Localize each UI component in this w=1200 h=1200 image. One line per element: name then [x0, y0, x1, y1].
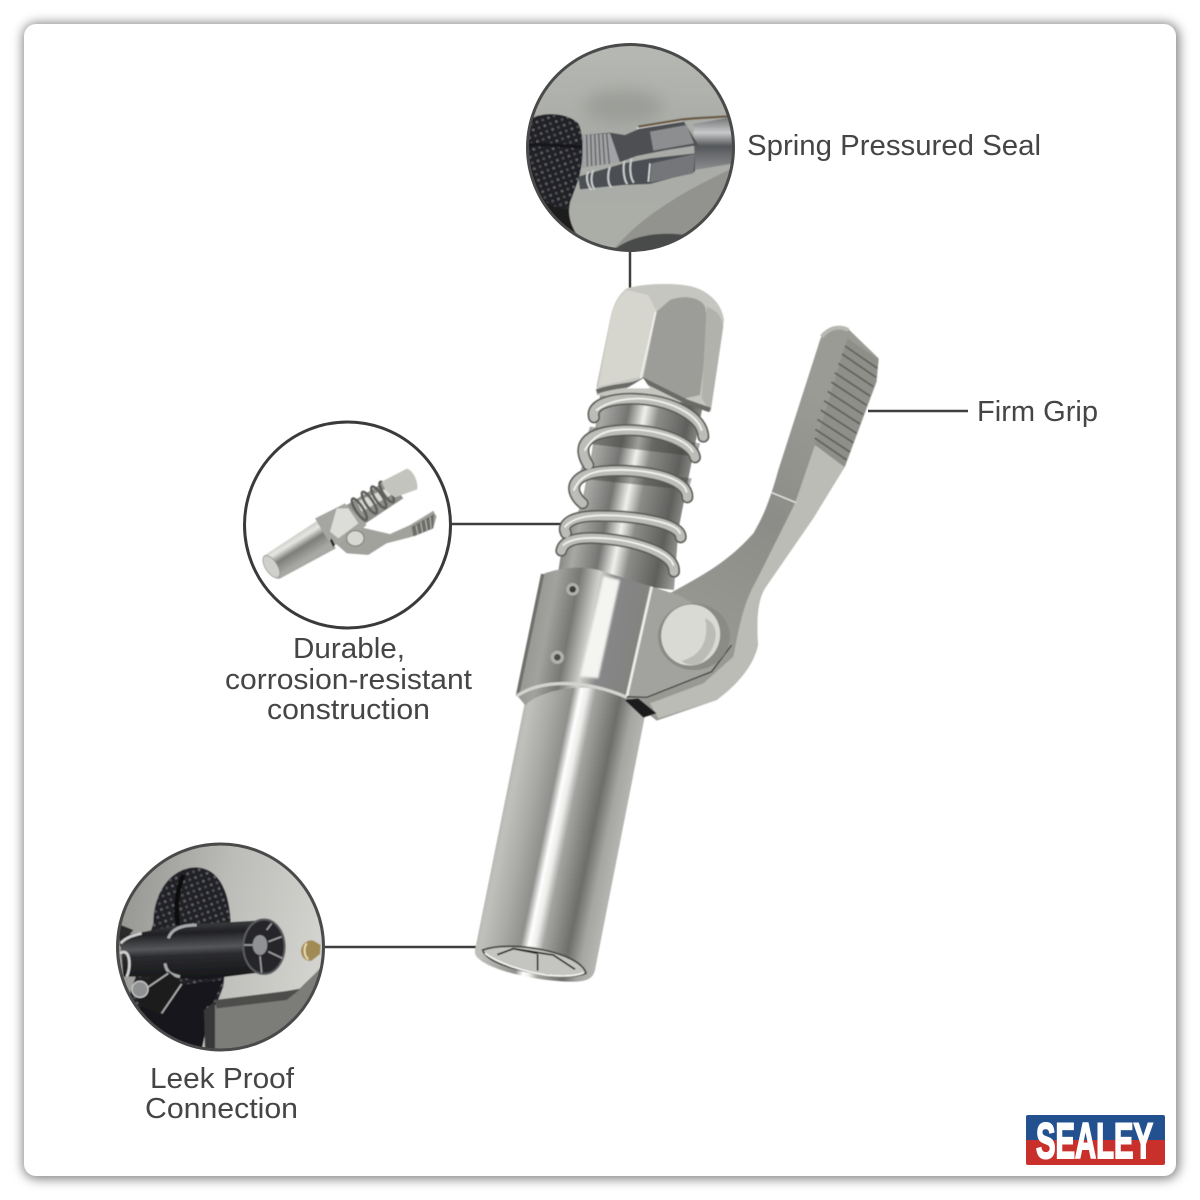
- callout line: leak proof connection: [324, 946, 476, 948]
- spring barrel: [578, 153, 695, 189]
- dark shadow between coils: [578, 427, 700, 490]
- mini lever: [333, 511, 437, 555]
- label: firm grip: Firm Grip: [977, 396, 1098, 428]
- callout line: firm grip: [868, 410, 968, 412]
- coupler mouth: [483, 946, 586, 976]
- callout line: durable construction: [451, 523, 562, 525]
- label: durable, corrosion-resistant construction: Durable,: [293, 633, 405, 665]
- mini nut: [382, 469, 417, 497]
- photo: leak proof connection: [119, 846, 322, 1048]
- label: durable, corrosion-resistant construction: [225, 633, 472, 726]
- label: durable, corrosion-resistant construction: corrosion-resistant: [225, 664, 472, 696]
- upper tube under spring: [557, 383, 703, 590]
- mini neck: [346, 483, 404, 524]
- photo: miniature whole coupler: [262, 468, 437, 580]
- mini collar: [315, 503, 367, 547]
- collar band with rivet holes: [517, 568, 652, 705]
- spring coils: [561, 399, 703, 572]
- lever: [630, 326, 879, 721]
- circle frame: durable construction: [244, 422, 450, 628]
- brass nipple: [301, 940, 321, 961]
- tube: [693, 117, 734, 170]
- photo: spring pressured seal: [529, 46, 732, 249]
- lever arm: [583, 121, 698, 167]
- mini coils: [349, 480, 396, 522]
- label: leek proof connection: [145, 1063, 298, 1125]
- mini lower tube: [263, 521, 336, 579]
- black gap beneath plate: [625, 698, 657, 717]
- lower tube of the coupler: [475, 670, 649, 982]
- label: leek proof connection: Leek Proof: [150, 1063, 295, 1095]
- tube end: [243, 919, 285, 974]
- pivot plate: [627, 587, 730, 698]
- hex nut: [597, 284, 724, 412]
- label: spring pressured seal: Spring Pressured Seal: [747, 130, 1041, 162]
- circle frame: leak proof connection: [118, 844, 324, 1050]
- label: leek proof connection: Connection: [145, 1093, 298, 1125]
- grip ribs: [583, 133, 620, 167]
- callout line: seal to tool: [629, 250, 631, 288]
- circle frame: spring pressured seal: [528, 44, 734, 250]
- pivot pin: [653, 596, 730, 674]
- label: durable, corrosion-resistant construction: construction: [267, 694, 430, 726]
- bracket: [138, 971, 182, 1012]
- main tool: grease coupler body, spring and lever: [517, 284, 879, 721]
